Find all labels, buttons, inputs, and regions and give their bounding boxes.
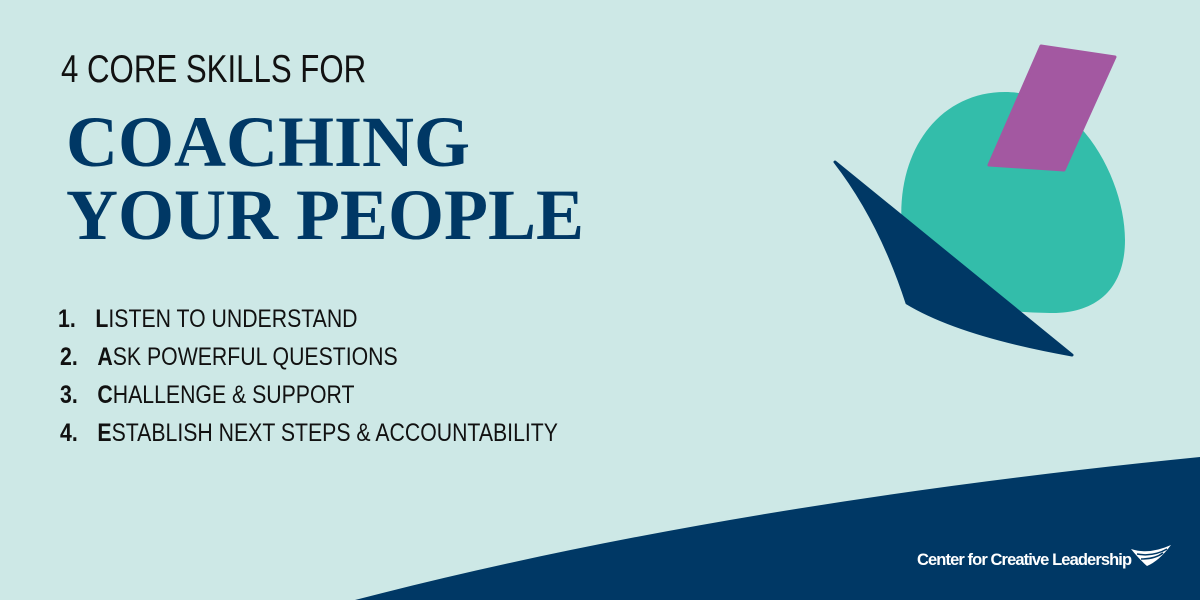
logo: Center for Creative Leadership (917, 551, 1131, 569)
bottom navy wave (355, 457, 1200, 600)
logo (917, 545, 1171, 569)
skill list: 1. (58, 305, 76, 333)
teal blob (901, 92, 1125, 313)
purple parallelogram (989, 46, 1115, 170)
skill list: E (97, 419, 112, 447)
title main (66, 102, 584, 255)
skill list: A (97, 343, 113, 371)
skill list: 3. (60, 381, 78, 409)
skill list: SK POWERFUL QUESTIONS (113, 343, 398, 371)
navy blade (835, 162, 1072, 355)
icon: logo wings (1131, 545, 1171, 566)
skill list: HALLENGE & SUPPORT (113, 381, 354, 409)
skill list: ISTEN TO UNDERSTAND (108, 305, 358, 333)
skill list: C (97, 381, 113, 409)
skill list: 4. (60, 419, 78, 447)
skill list: L (95, 305, 108, 333)
title main: YOUR PEOPLE (66, 175, 584, 255)
skill list: 2. (60, 343, 78, 371)
skill list (58, 305, 558, 447)
skill list: STABLISH NEXT STEPS & ACCOUNTABILITY (112, 419, 558, 447)
title main: COACHING (66, 102, 470, 182)
title line 1: 4 CORE SKILLS FOR (61, 48, 366, 91)
